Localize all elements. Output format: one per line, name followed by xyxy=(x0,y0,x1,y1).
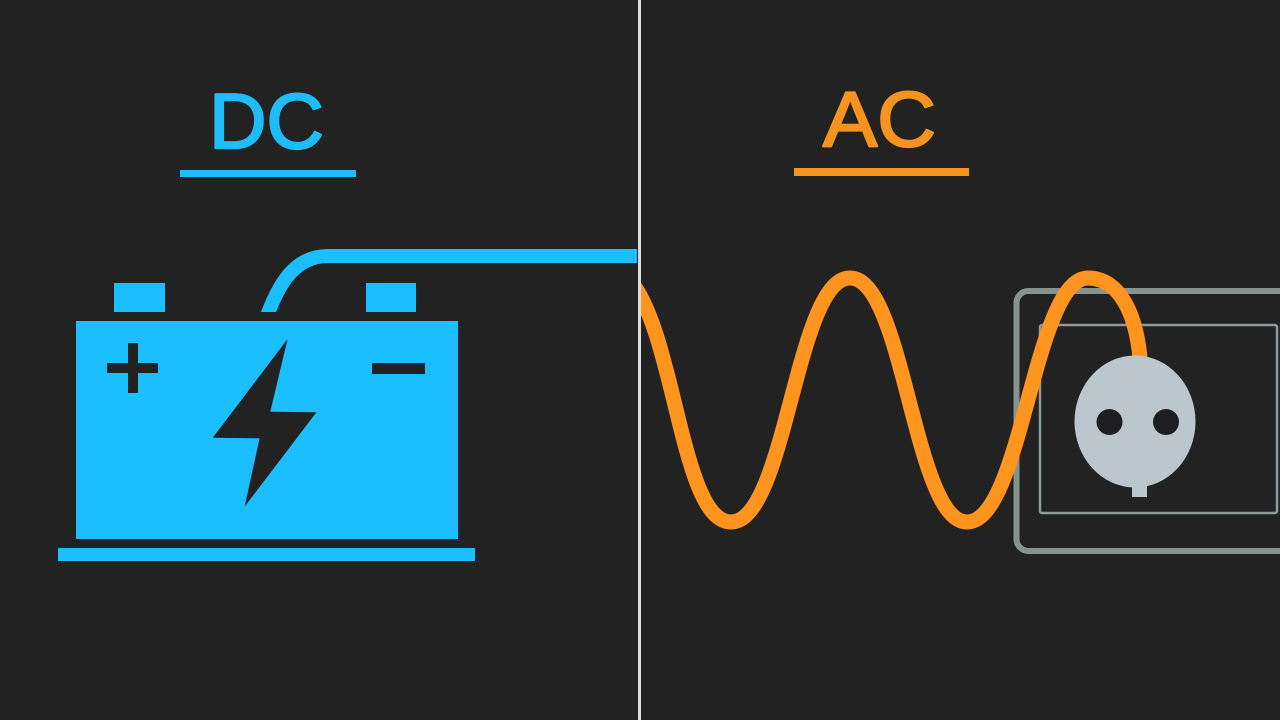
battery base xyxy=(58,548,475,561)
battery body xyxy=(76,321,458,539)
plus sign xyxy=(107,343,158,393)
battery terminal left xyxy=(114,283,165,312)
minus sign xyxy=(372,363,425,374)
plug hole left xyxy=(1096,409,1122,435)
heading: AC: AC xyxy=(823,75,936,163)
plug hole right xyxy=(1153,409,1179,435)
panel: AC side xyxy=(632,75,1280,551)
DC cable xyxy=(261,249,637,312)
AC sine wave cable xyxy=(632,278,1140,522)
icon: plug xyxy=(1074,356,1196,497)
heading: DC: DC xyxy=(209,77,324,165)
panel: DC side xyxy=(58,77,637,561)
center divider xyxy=(638,0,641,720)
AC heading underline xyxy=(794,168,969,176)
socket inner frame xyxy=(1040,325,1277,513)
plug body xyxy=(1074,356,1196,488)
icon: wall socket xyxy=(1016,291,1280,551)
lightning bolt xyxy=(213,339,316,507)
icon: battery xyxy=(58,283,475,561)
DC heading underline xyxy=(180,170,356,177)
plug tab xyxy=(1132,484,1147,497)
socket outer frame xyxy=(1016,291,1280,551)
battery terminal right xyxy=(366,283,416,312)
